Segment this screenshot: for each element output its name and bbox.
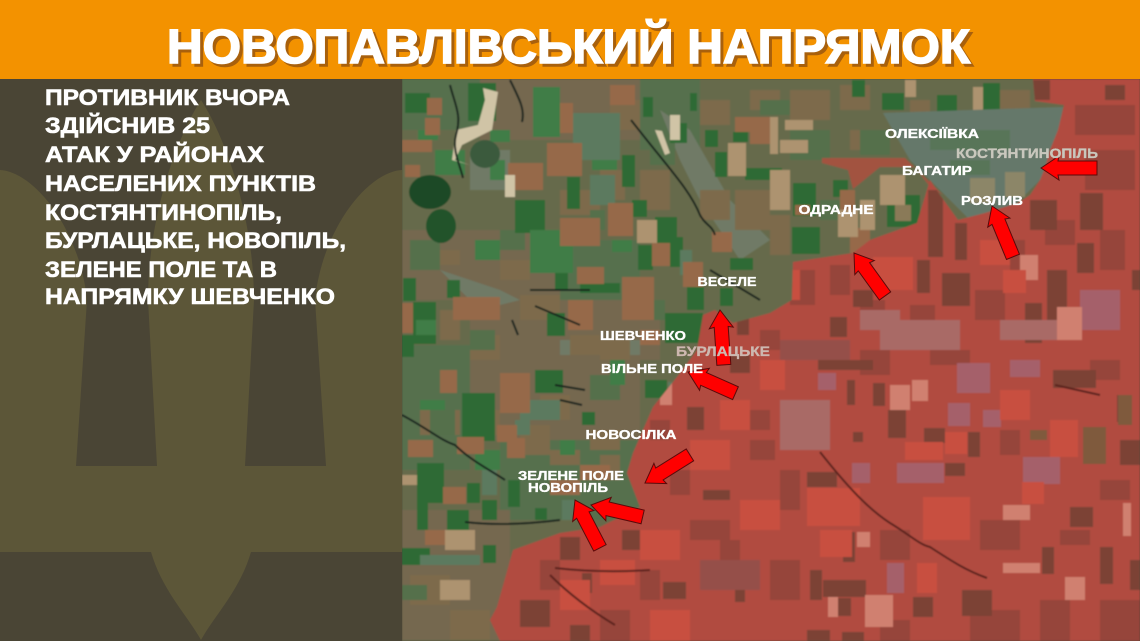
place labels [518, 126, 1098, 495]
arrow: Новопіль south [564, 494, 611, 553]
arrow: Костянтинопіль [1041, 156, 1097, 180]
medium dark mosaic [540, 105, 1140, 641]
label: Розлив: РОЗЛИВ [961, 193, 1023, 208]
title shadow: НОВОПАВЛІВСЬКИЙ НАПРЯМОК [170, 22, 974, 77]
label: Новосілка: НОВОСІЛКА [586, 427, 677, 442]
trident emblem [0, 100, 402, 640]
forest patches [409, 175, 451, 209]
summary text block: ЗЕЛЕНЕ ПОЛЕ ТА В [45, 257, 277, 282]
rivers in red zone [549, 384, 1101, 626]
title: НОВОПАВЛІВСЬКИЙ НАПРЯМОК [167, 19, 971, 74]
summary text block: ЗДІЙСНИВ 25 [45, 113, 210, 138]
light fields [660, 255, 1131, 627]
label: Веселе: ВЕСЕЛЕ [698, 274, 757, 289]
summary text block: КОСТЯНТИНОПІЛЬ, [45, 200, 282, 225]
arrow: Вільне поле [683, 361, 740, 404]
mid green fields [416, 87, 632, 470]
mauve fields [818, 290, 1120, 593]
label: Шевченко: ШЕВЧЕНКО [600, 328, 686, 343]
muted brown mosaic [410, 85, 1030, 640]
arrow: Новосілка [639, 445, 696, 493]
label: Одрадне: ОДРАДНЕ [798, 202, 874, 217]
occupied territory red zone [490, 79, 1140, 641]
arrow: Одрадне [844, 246, 895, 303]
left panel [0, 79, 402, 641]
summary text block: ПРОТИВНИК ВЧОРА [45, 85, 290, 110]
header banner [0, 0, 1140, 79]
bright red fields [560, 240, 1078, 641]
label: Новопіль: НОВОПІЛЬ [528, 480, 608, 495]
summary text block: БУРЛАЦЬКЕ, НОВОПІЛЬ, [45, 228, 346, 253]
muted green mosaic [402, 100, 890, 600]
green ring inner [895, 205, 911, 221]
arrow: Новопіль east [588, 493, 645, 529]
label: Багатир: БАГАТИР [902, 163, 972, 178]
summary text block: НАПРЯМКУ ШЕВЧЕНКО [45, 284, 335, 309]
dark fields [520, 80, 1140, 641]
label: Вільне поле: ВІЛЬНЕ ПОЛЕ [601, 361, 703, 376]
label: Олексіївка: ОЛЕКСІЇВКА [885, 126, 980, 141]
satellite map [402, 79, 1140, 641]
summary text block [45, 85, 346, 309]
mottled terrain [402, 79, 700, 520]
thin red band top [822, 158, 943, 195]
pale bare ground [452, 88, 680, 197]
arrow: Веселе [708, 309, 736, 366]
dark green fields [402, 80, 1000, 565]
summary text block: НАСЕЛЕНИХ ПУНКТІВ [45, 171, 316, 196]
tan fields [402, 80, 983, 600]
label: Бурлацьке: БУРЛАЦЬКЕ [676, 343, 770, 359]
brown fields [402, 85, 870, 545]
grey green fields [420, 113, 692, 565]
label: Зелене поле: ЗЕЛЕНЕ ПОЛЕ [518, 468, 624, 483]
label: Костянтинопіль: КОСТЯНТИНОПІЛЬ [956, 145, 1098, 161]
summary text block: АТАК У РАЙОНАХ [45, 142, 264, 167]
attack arrows [564, 156, 1097, 553]
settlement area [883, 107, 1063, 220]
rivers [402, 80, 760, 524]
arrow: Розлив [981, 201, 1024, 261]
